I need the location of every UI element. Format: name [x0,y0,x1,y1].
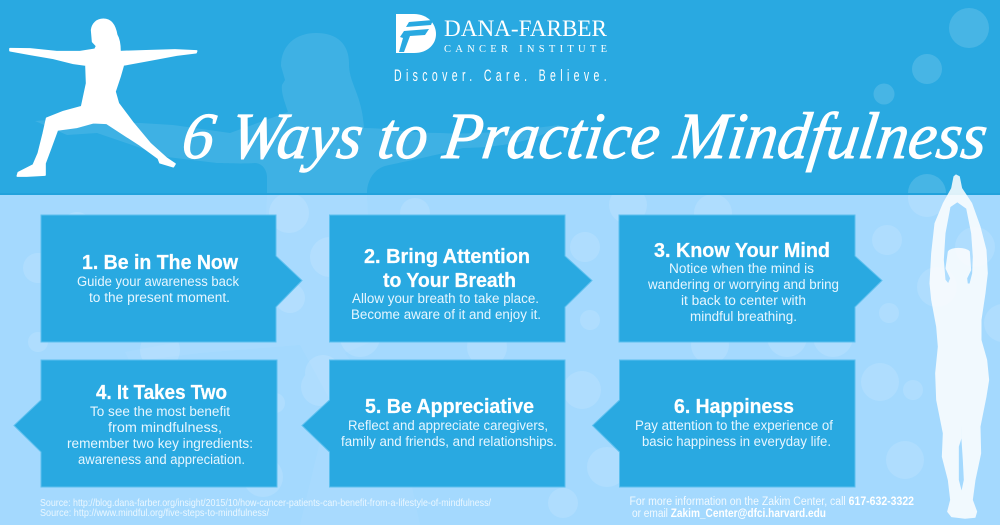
step 4 text: To see the most benefit [90,404,230,419]
step 3 heading: 3. Know Your Mind [654,240,830,262]
background: lower bubbles [23,179,1000,518]
step 4 text: from mindfulness, [108,420,222,435]
tagline: Discover. Care. Believe. [394,65,607,85]
step 6 text [635,418,833,449]
step 3 text: wandering or worrying and bring [647,277,839,292]
step 2 heading [364,246,530,292]
source citations: Source: http://www.mindful.org/five-steps-to-mindfulness/ [40,507,269,519]
step 2 heading: 2. Bring Attention [364,246,530,268]
panel: step 3 [619,215,882,342]
icon: warrior pose yoga silhouette [10,19,197,176]
step 1 heading: 1. Be in The Now [82,252,238,274]
contact information [630,496,914,520]
panel: step 2 [330,215,592,342]
box with left arrow [302,360,565,487]
contact information: or email Zakim_Center@dfci.harvard.edu [632,508,826,520]
background: header band [0,0,1000,194]
background: ghost warrior silhouette [35,33,560,193]
panel: step 6 [592,360,855,487]
main title: 6 Ways to Practice Mindfulness [178,100,992,173]
box with left arrow [14,360,277,487]
logo [396,14,608,55]
step 3 text: it back to center with [681,293,806,308]
source citations: Source: http://blog.dana-farber.org/insight/2015/10/how-cancer-patients-can-benefit-from-a-lifestyle-of-mindfulness/ [40,497,491,509]
box with right arrow [41,215,302,342]
step 3 text [647,261,839,324]
logo subtitle: CANCER INSTITUTE [444,44,607,55]
step 1 text [77,274,239,305]
step 1 text: Guide your awareness back [77,274,239,289]
step 2 text: Become aware of it and enjoy it. [351,307,541,322]
icon: standing yoga silhouette with raised arms [930,175,989,518]
step 6 text: basic happiness in everyday life. [642,434,831,449]
step 2 text: Allow your breath to take place. [352,291,539,306]
box with right arrow [330,215,592,342]
background: lower ghost figure [125,195,420,525]
panel: step 1 [41,215,302,342]
step 1 text: to the present moment. [89,290,230,305]
step 5 text: Reflect and appreciate caregivers, [348,418,548,433]
contact information: For more information on the Zakim Center, call 617-632-3322 [630,496,914,508]
panel: step 5 [302,360,565,487]
logo mark: D with F [396,14,436,53]
background: header band edge [0,193,1000,195]
background: header bubbles [874,8,989,193]
step 6 text: Pay attention to the experience of [635,418,833,433]
step 3 text: Notice when the mind is [669,261,814,276]
step 4 heading: 4. It Takes Two [96,382,227,404]
step 4 text: remember two key ingredients: [67,436,253,451]
step 5 heading: 5. Be Appreciative [365,396,534,418]
box with right arrow [619,215,882,342]
step 3 text: mindful breathing. [690,309,797,324]
step 4 text: awareness and appreciation. [78,452,245,467]
logo wordmark: DANA-FARBER [444,16,608,41]
step 2 text [351,291,541,322]
box with left arrow [592,360,855,487]
panel: step 4 [14,360,277,487]
source citations [40,497,491,519]
step 5 text [341,418,557,449]
step 6 heading: 6. Happiness [674,396,794,418]
step 2 heading: to Your Breath [383,270,516,292]
step 4 text [67,404,253,467]
step 5 text: family and friends, and relationships. [341,434,557,449]
